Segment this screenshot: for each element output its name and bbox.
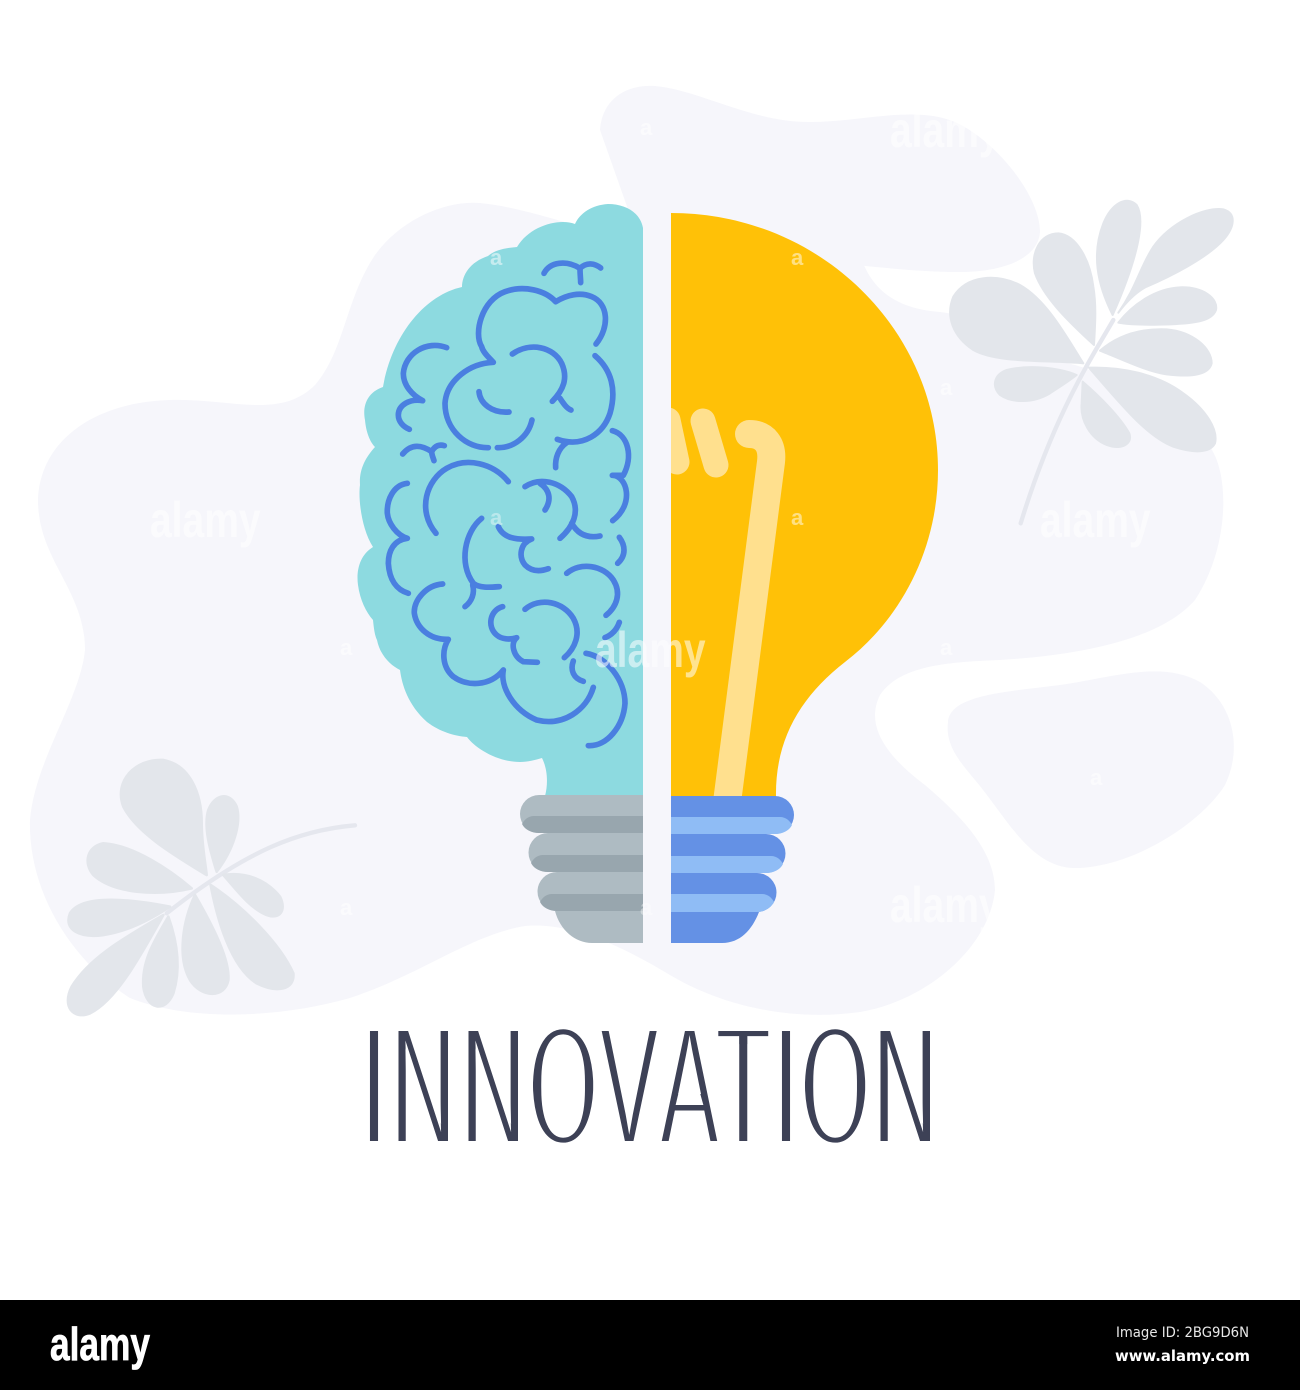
watermarks: a — [940, 635, 953, 660]
icon: right leaf branch — [950, 201, 1233, 523]
watermarks: alamy — [1040, 491, 1151, 548]
watermarks: a — [340, 895, 353, 920]
bulb base: blue right half — [671, 796, 794, 943]
footer url: www.alamy.com — [1115, 1347, 1250, 1365]
watermarks: alamy — [595, 621, 706, 678]
watermarks: a — [940, 375, 953, 400]
watermarks: alamy — [890, 876, 1001, 933]
watermarks: a — [640, 895, 653, 920]
icon: half light bulb — [668, 213, 938, 810]
filament — [668, 420, 771, 810]
bulb glass — [671, 213, 938, 797]
footer image id: Image ID: 2BG9D6N — [1116, 1324, 1249, 1341]
icon: half brain — [358, 204, 643, 796]
icon: left leaf branch — [68, 760, 355, 1015]
title: INNOVATION — [362, 989, 937, 1181]
watermarks: a — [490, 245, 503, 270]
brain folds upper — [398, 263, 628, 475]
background blobs — [30, 86, 1234, 1015]
watermarks: a — [791, 245, 804, 270]
brain silhouette — [358, 204, 643, 796]
brain folds lower — [387, 463, 627, 746]
watermarks — [150, 101, 1151, 933]
watermarks: alamy — [890, 101, 1001, 158]
watermarks: a — [1090, 765, 1103, 790]
watermarks: a — [340, 635, 353, 660]
watermarks: a — [640, 115, 653, 140]
footer logo: alamy — [50, 1318, 150, 1370]
footer bar — [0, 1300, 1300, 1390]
watermarks: a — [791, 505, 804, 530]
bulb base: grey left half — [520, 795, 643, 943]
watermarks: alamy — [150, 491, 261, 548]
watermarks: a — [490, 505, 503, 530]
